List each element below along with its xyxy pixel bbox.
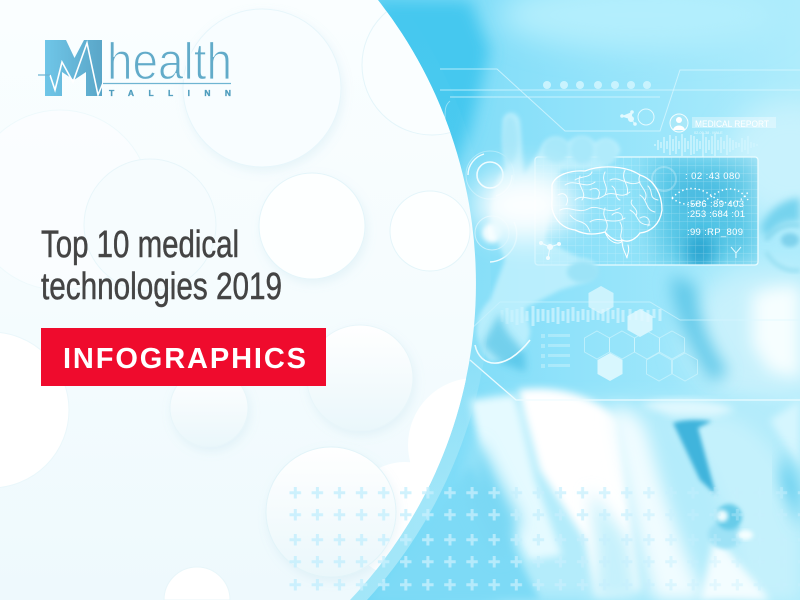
photo background: doctor with holographic interface: [340, 0, 800, 600]
bar readout: [502, 306, 660, 326]
curved translucent band: [350, 0, 491, 600]
lab coat: [370, 389, 800, 600]
glass hud panel: :253 :684 :01: [687, 209, 745, 220]
infographics badge: [41, 328, 326, 386]
molecule icon: [540, 242, 560, 260]
medical report header: MEDICAL REPORT: [695, 119, 769, 129]
logo tallinn word: TALLINN: [109, 88, 231, 98]
top-left saturated area: [370, 0, 490, 200]
glass hud panel: :99 :RP_809: [687, 227, 743, 238]
infographics badge: INFOGRAPHICS: [63, 343, 306, 375]
glass hud panel: [535, 157, 758, 272]
medical report header: [670, 114, 776, 135]
logo: [38, 33, 232, 98]
title: technologies 2019: [41, 266, 282, 308]
holographic interface: [440, 69, 800, 400]
hand: [475, 113, 620, 372]
glow: [473, 171, 577, 239]
logo M mark: [45, 40, 102, 96]
cross grid overlay: [289, 487, 800, 591]
hexagons: [584, 286, 698, 381]
logo pulse line: [50, 43, 103, 95]
title: Top 10 medical: [41, 224, 239, 266]
glass hud panel: :586 :89 403: [687, 199, 744, 210]
frame lines: [440, 69, 800, 400]
top highlight: [500, 0, 780, 50]
waveform: [655, 133, 757, 157]
small list icons: [541, 334, 570, 368]
face: [671, 100, 800, 405]
molecule icon: [621, 109, 654, 125]
glass hud panel: : 02 :43 080: [685, 171, 740, 182]
hud rings: [466, 151, 517, 262]
brain: [552, 167, 662, 258]
stethoscope: [708, 504, 753, 549]
logo health word: health: [107, 33, 232, 91]
medical report header: 02-09-38 . MALE: [694, 131, 723, 135]
decorative discs: [0, 8, 470, 600]
title: [41, 224, 282, 308]
indicator dots: [543, 81, 651, 89]
white curved panel: [0, 0, 476, 600]
